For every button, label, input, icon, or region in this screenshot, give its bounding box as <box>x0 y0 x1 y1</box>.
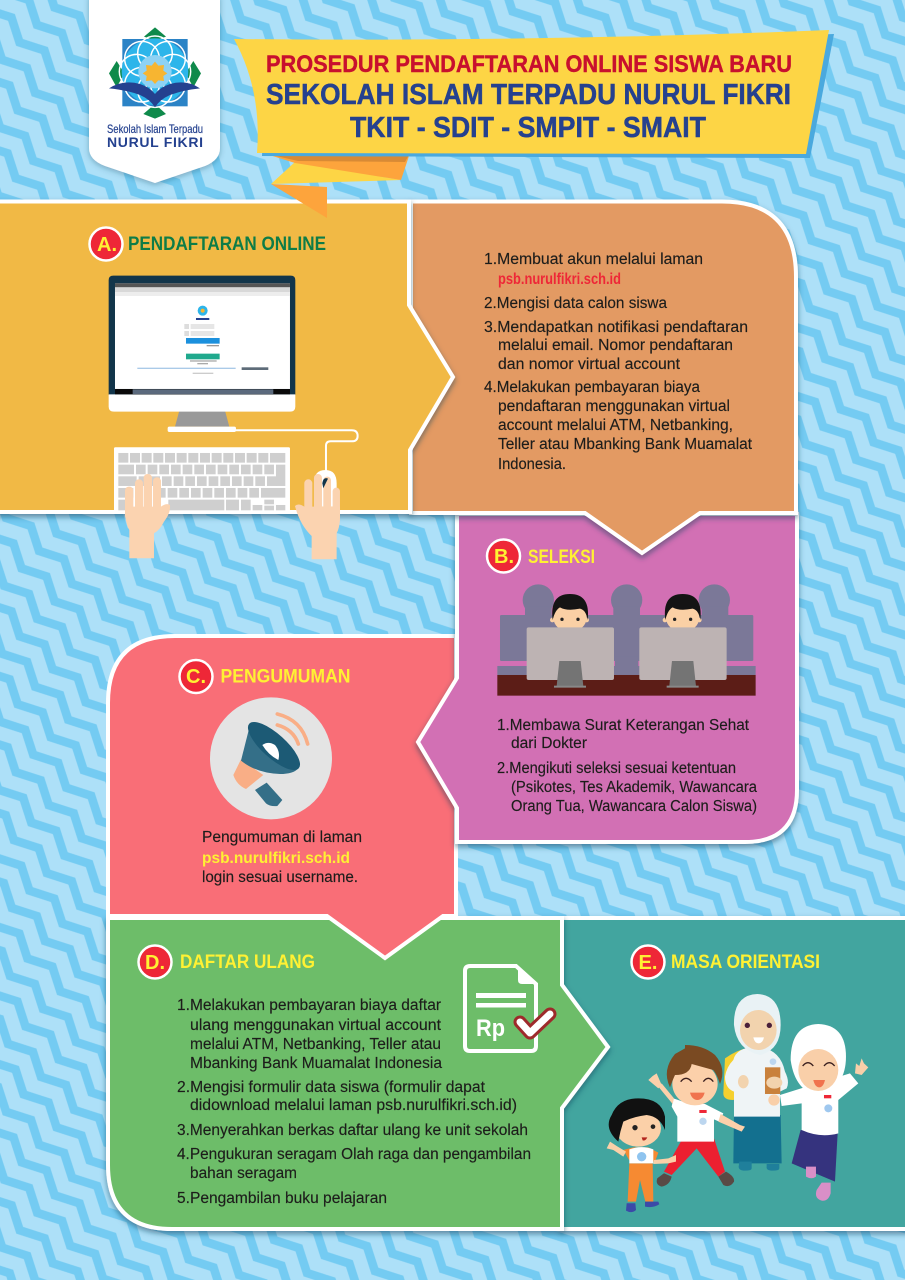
logo tab <box>89 0 220 183</box>
icon: megaphone <box>210 697 332 819</box>
banner fold <box>263 153 410 218</box>
panel: C pengumuman background <box>108 636 456 958</box>
steps text B: 2.Mengikuti seleksi sesuai ketentuan <box>497 760 736 777</box>
steps text D: 2.Mengisi formulir data siswa (formulir dapat <box>177 1079 486 1096</box>
icon: payment document <box>465 966 550 1051</box>
steps text B: dari Dokter <box>511 735 587 752</box>
logo name small: Sekolah Islam Terpadu <box>107 122 203 136</box>
steps text A: Teller atau Mbanking Bank Muamalat <box>498 436 753 453</box>
monitor <box>109 276 295 432</box>
steps text A: 4.Melakukan pembayaran biaya <box>484 379 700 396</box>
student 2 <box>663 594 702 632</box>
steps text A: 1.Membuat akun melalui laman <box>484 251 703 268</box>
panel: A pendaftaran online background <box>0 202 453 512</box>
heading D <box>138 946 315 978</box>
steps text B: Orang Tua, Wawancara Calon Siswa) <box>511 798 757 815</box>
heading D: DAFTAR ULANG <box>180 952 315 973</box>
title line 3: TKIT - SDIT - SMPIT - SMAIT <box>350 112 706 144</box>
girl with bag <box>723 994 788 1171</box>
announcement text C: login sesuai username. <box>202 869 358 886</box>
monitors <box>527 627 727 688</box>
steps text D: melalui ATM, Netbanking, Teller atau <box>190 1036 441 1053</box>
boy <box>648 1045 745 1187</box>
keyboard <box>114 447 290 514</box>
title line 2: SEKOLAH ISLAM TERPADU NURUL FIKRI <box>266 79 791 111</box>
left hand <box>125 474 170 558</box>
title line 1: PROSEDUR PENDAFTARAN ONLINE SISWA BARU <box>266 51 792 78</box>
announcement text C <box>202 829 362 886</box>
panel: B seleksi background <box>418 514 797 842</box>
steps text D: didownload melalui laman psb.nurulfikri.sch.id) <box>190 1097 517 1114</box>
heading E <box>632 946 820 978</box>
steps text A: melalui email. Nomor pendaftaran <box>498 337 733 354</box>
logo name large: NURUL FIKRI <box>107 134 203 150</box>
logo emblem <box>109 27 201 119</box>
icon: payment document: Rp <box>476 1015 505 1042</box>
heading C: C. <box>186 666 206 688</box>
steps text D: 5.Pengambilan buku pelajaran <box>177 1190 387 1207</box>
steps text D: bahan seragam <box>190 1165 297 1182</box>
heading A: PENDAFTARAN ONLINE <box>128 234 326 255</box>
steps text D: ulang menggunakan virtual account <box>190 1017 442 1034</box>
steps text D <box>177 997 531 1207</box>
steps text A: Indonesia. <box>498 456 566 473</box>
steps text A <box>484 251 753 473</box>
heading D: D. <box>145 952 165 974</box>
steps text A: 2.Mengisi data calon siswa <box>484 295 667 312</box>
girl waving <box>768 1024 868 1201</box>
table <box>497 675 756 696</box>
announcement text C: Pengumuman di laman <box>202 829 362 846</box>
steps text A: pendaftaran menggunakan virtual <box>498 398 730 415</box>
small child <box>607 1098 676 1212</box>
steps text A: 3.Mendapatkan notifikasi pendaftaran <box>484 319 748 336</box>
mouse <box>314 470 337 507</box>
panel: D daftar ulang background <box>108 918 608 1229</box>
heading B: SELEKSI <box>528 547 595 568</box>
heading E: E. <box>639 952 657 974</box>
steps text D: 1.Melakukan pembayaran biaya daftar <box>177 997 441 1014</box>
steps text D: 4.Pengukuran seragam Olah raga dan pengambilan <box>177 1146 531 1163</box>
steps text B: (Psikotes, Tes Akademik, Wawancara <box>511 779 757 796</box>
panel: A details background <box>411 202 796 553</box>
title banner <box>234 30 834 218</box>
steps text D: Mbanking Bank Muamalat Indonesia <box>190 1055 442 1072</box>
steps text A: dan nomor virtual account <box>498 356 681 373</box>
illustration: students at computers <box>497 584 756 696</box>
steps text D: 3.Menyerahkan berkas daftar ulang ke unit sekolah <box>177 1122 528 1139</box>
steps text B <box>497 717 757 815</box>
illustration: students <box>607 994 868 1212</box>
heading B <box>487 540 595 572</box>
computer illustration <box>109 276 358 559</box>
steps text A: psb.nurulfikri.sch.id <box>498 271 621 288</box>
steps text B: 1.Membawa Surat Keterangan Sehat <box>497 717 750 734</box>
silhouettes <box>497 584 756 675</box>
right hand <box>295 474 340 559</box>
heading B: B. <box>494 546 514 568</box>
heading C: PENGUMUMAN <box>220 666 350 688</box>
heading A: A. <box>97 234 117 256</box>
heading C <box>180 660 350 693</box>
heading E: MASA ORIENTASI <box>671 952 820 973</box>
announcement text C: psb.nurulfikri.sch.id <box>202 850 350 867</box>
panel: E masa orientasi background <box>562 918 905 1229</box>
heading A <box>90 228 326 260</box>
student 1 <box>550 594 589 632</box>
steps text A: account melalui ATM, Netbanking, <box>498 417 733 434</box>
mouse cable <box>235 430 358 472</box>
